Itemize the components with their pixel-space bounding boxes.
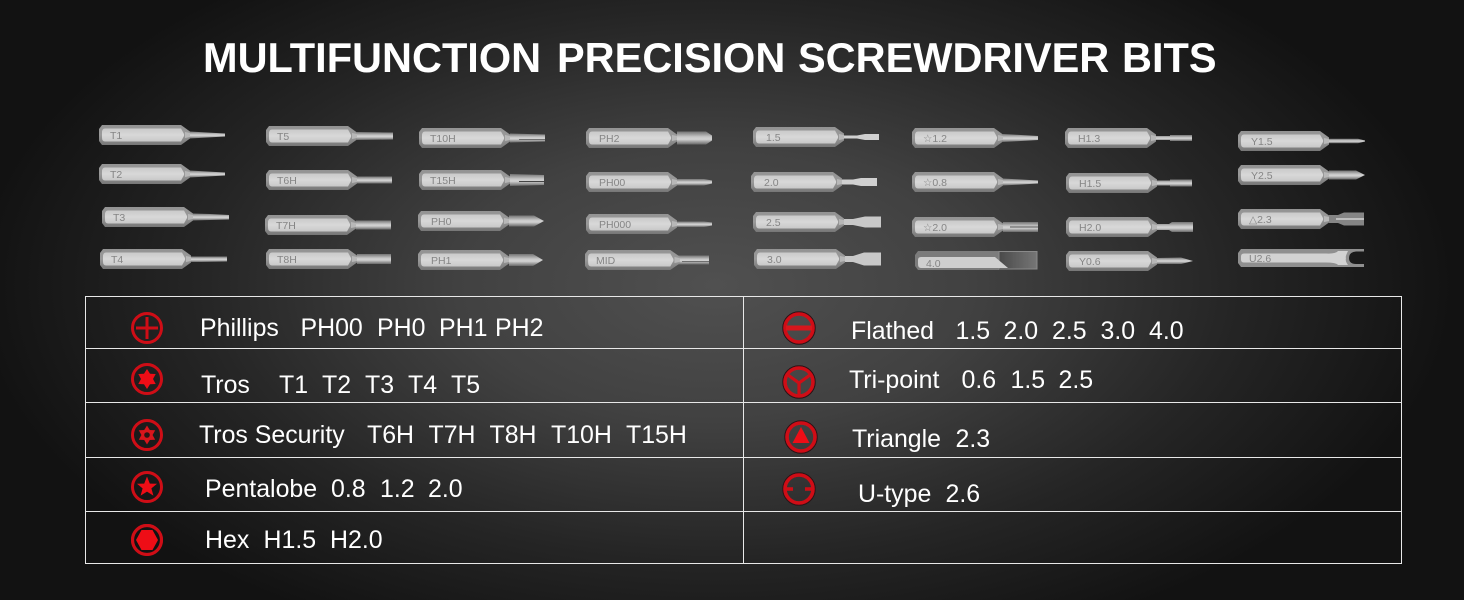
row: Tros: Tros: [201, 371, 250, 399]
row: Tri-point: 0.6: [962, 366, 996, 394]
bit MID: MID: [596, 255, 616, 267]
bit 2.5: 2.5: [766, 217, 781, 229]
row: Tros Security: [132, 420, 687, 450]
row: Tros: T5: [451, 371, 480, 399]
row: Phillips: Phillips: [200, 314, 279, 342]
row: Hex: Hex: [205, 526, 250, 554]
bit H2.0: H2.0: [1079, 222, 1101, 234]
bit T8H: [266, 249, 391, 269]
bit PH2: PH2: [599, 133, 620, 145]
panel: bit types table: [85, 296, 1402, 564]
bit 3.0: 3.0: [767, 254, 782, 266]
row: Phillips: PH2: [495, 314, 543, 342]
table grid: [85, 296, 1402, 564]
bit H1.3: H1.3: [1078, 133, 1100, 145]
icon: Tros: [132, 364, 162, 394]
row: Flathed: 2.5: [1052, 317, 1087, 345]
bit T10H: [419, 128, 545, 148]
bit T7H: T7H: [276, 220, 296, 232]
bit T5: [266, 126, 393, 146]
row: Phillips: PH1: [439, 314, 487, 342]
icon: Pentalobe: [132, 472, 162, 502]
bit U2.6: [1238, 249, 1364, 267]
bit Y1.5: [1238, 131, 1365, 151]
row: Tros: T2: [322, 371, 351, 399]
bit H1.5: H1.5: [1079, 178, 1101, 190]
panel: screwdriver bits: [99, 125, 1365, 271]
row: Tros: T4: [408, 371, 437, 399]
bit T7H: [265, 215, 391, 235]
icon: U-type: [783, 473, 815, 505]
bit PH1: [418, 250, 543, 270]
bit 4.0: [915, 251, 1037, 270]
row: Flathed: 3.0: [1100, 317, 1135, 345]
icon: Tri-point: [783, 366, 815, 398]
row: Triangle: [785, 421, 990, 453]
row: Pentalobe: 2.0: [428, 475, 463, 503]
row: Flathed: Flathed: [851, 317, 934, 345]
bit PH000: [586, 214, 712, 234]
bit T8H: T8H: [277, 254, 297, 266]
bit T4: T4: [111, 254, 123, 266]
bit U2.6: U2.6: [1249, 253, 1271, 265]
bit Y2.5: Y2.5: [1251, 170, 1273, 182]
icon: Flathed: [783, 312, 815, 344]
row: Flathed: 4.0: [1149, 317, 1184, 345]
bit 2.5: [753, 212, 881, 232]
bit 2.0: [751, 172, 877, 192]
bit T3: T3: [113, 212, 125, 224]
bit triangle 2.3: [1238, 209, 1364, 229]
row: Tros Security: Tros Security: [199, 421, 345, 449]
bit PH0: [418, 211, 544, 231]
bit T4: [100, 249, 227, 269]
bit H1.5: [1066, 173, 1192, 193]
icon: Hex: [132, 526, 162, 554]
row: Tros: [132, 364, 480, 399]
bit T1: [99, 125, 225, 145]
row: U-type: U-type: [858, 480, 931, 508]
row: Tros Security: T7H: [428, 421, 476, 449]
row: Hex: H1.5: [264, 526, 316, 554]
bit star 1.2: ☆1.2: [923, 133, 947, 145]
bit T2: [99, 164, 225, 184]
bit T5: T5: [277, 131, 289, 143]
title: BITS: [1122, 34, 1217, 81]
row: Pentalobe: [132, 472, 463, 503]
icon: Tros Security: [132, 420, 162, 450]
bit PH1: PH1: [431, 255, 452, 267]
row: Flathed: 2.0: [1004, 317, 1038, 345]
row: Pentalobe: 0.8: [331, 475, 366, 503]
bit H2.0: [1066, 217, 1193, 237]
bit 4.0: 4.0: [926, 258, 941, 270]
bit T3: [102, 207, 229, 227]
row: Tri-point: 1.5: [1010, 366, 1045, 394]
icon: Phillips: [132, 314, 162, 342]
bit T2: T2: [110, 169, 122, 181]
bit T1: T1: [110, 130, 122, 142]
row: Triangle: Triangle: [852, 425, 941, 453]
bit T10H: T10H: [430, 133, 456, 145]
row: Tros Security: T10H: [551, 421, 612, 449]
row: Hex: [132, 526, 383, 554]
icon: Triangle: [785, 421, 817, 453]
bit T15H: [419, 170, 544, 190]
bit 1.5: [753, 127, 879, 147]
bit T15H: T15H: [430, 175, 456, 187]
bit Y0.6: [1066, 251, 1193, 271]
row: Tri-point: Tri-point: [849, 366, 939, 394]
bit triangle 2.3: △2.3: [1249, 214, 1272, 226]
bit T6H: T6H: [277, 175, 297, 187]
row: Hex: H2.0: [330, 526, 383, 554]
row: Phillips: PH0: [377, 314, 425, 342]
bit H1.3: [1065, 128, 1192, 148]
row: U-type: 2.6: [946, 480, 980, 508]
bit PH000: PH000: [599, 219, 631, 231]
bit PH2: [586, 128, 712, 148]
row: Tros: T3: [365, 371, 394, 399]
bit star 2.0: [912, 217, 1038, 237]
title: PRECISION: [557, 34, 785, 81]
bit T6H: [266, 170, 392, 190]
bit Y2.5: [1238, 165, 1365, 185]
row: Tros: T1: [279, 371, 308, 399]
bit 2.0: 2.0: [764, 177, 779, 189]
bit 1.5: 1.5: [766, 132, 781, 144]
row: Tri-point: 2.5: [1058, 366, 1093, 394]
row: Pentalobe: Pentalobe: [205, 475, 317, 503]
bit star 0.8: [912, 172, 1038, 192]
row: Tros Security: T8H: [490, 421, 537, 449]
bit Y1.5: Y1.5: [1251, 136, 1273, 148]
bit star 2.0: ☆2.0: [923, 222, 947, 234]
bit Y0.6: Y0.6: [1079, 256, 1101, 268]
row: Tros Security: T6H: [367, 421, 414, 449]
bit star 1.2: [912, 128, 1038, 148]
title: MULTIFUNCTION: [203, 34, 541, 81]
bit star 0.8: ☆0.8: [923, 177, 947, 189]
row: Phillips: [132, 314, 543, 342]
bit PH00: [586, 172, 712, 192]
row: Flathed: 1.5: [956, 317, 990, 345]
bit 3.0: [754, 249, 881, 269]
row: Tros Security: T15H: [626, 421, 687, 449]
bit PH0: PH0: [431, 216, 452, 228]
row: Flathed: [783, 312, 1184, 345]
row: Tri-point: [783, 366, 1093, 398]
title: SCREWDRIVER: [798, 34, 1109, 81]
bit PH00: PH00: [599, 177, 625, 189]
bit MID: [585, 250, 709, 270]
row: Pentalobe: 1.2: [380, 475, 415, 503]
row: Phillips: PH00: [300, 314, 363, 342]
row: Triangle: 2.3: [956, 425, 990, 453]
row: U-type: [783, 473, 980, 508]
